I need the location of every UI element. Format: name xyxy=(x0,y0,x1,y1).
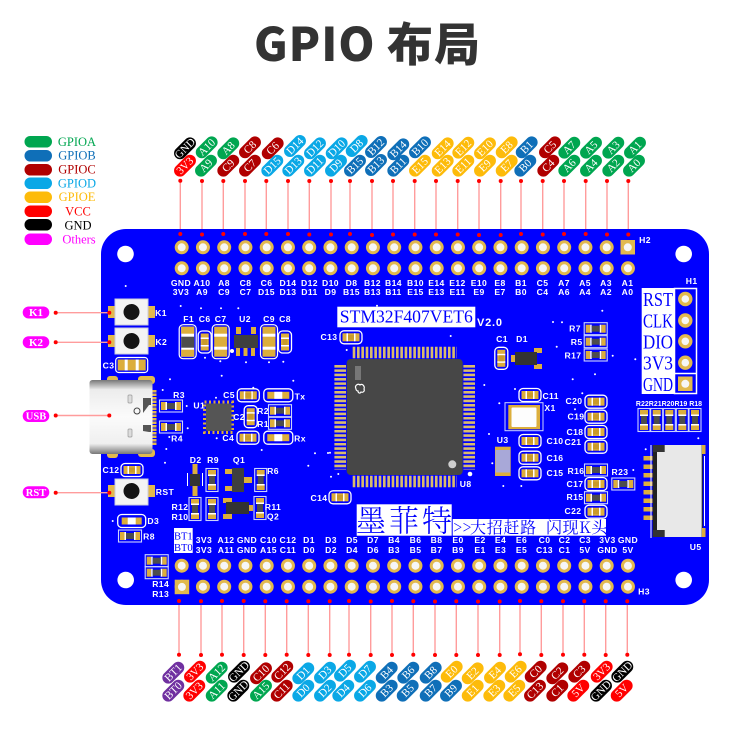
K1 label: K1 xyxy=(155,308,167,318)
crystal X1 with capacitors: C11 xyxy=(542,391,559,401)
SWD header H1: 3V3 xyxy=(643,352,673,374)
resistors R22 to R18 xyxy=(636,401,702,432)
top pin pills: A9 xyxy=(197,157,216,175)
SWD header H1: GND xyxy=(643,374,673,396)
bottom pin pills: C1 xyxy=(549,682,566,700)
bottom pin pills: 5V xyxy=(570,682,588,700)
C12 capacitor xyxy=(103,464,143,476)
bottom pin pills: GND xyxy=(226,678,251,704)
bottom header silkscreen: 3V3 xyxy=(599,535,616,545)
power section components: F1 xyxy=(183,314,194,324)
button K1 xyxy=(108,299,155,325)
bottom header silkscreen: B6 xyxy=(410,535,421,545)
right passive column: R23 xyxy=(612,467,628,477)
top header silkscreen: A4 xyxy=(579,287,591,297)
bottom pin pills: D1 xyxy=(295,665,313,683)
top header silkscreen: A2 xyxy=(600,287,612,297)
left callouts: RST xyxy=(26,488,46,499)
top header silkscreen: E9 xyxy=(473,287,485,297)
bottom pin pills: 3V3 xyxy=(184,680,206,702)
bottom pin pills: C3 xyxy=(571,663,589,681)
legend: GPIOA xyxy=(58,135,96,149)
top header silkscreen: E14 xyxy=(428,278,445,288)
U1 chip with passives: R1 xyxy=(257,419,269,429)
top pin pills: A8 xyxy=(220,139,238,158)
legend: GPIOE xyxy=(59,190,96,204)
top header silkscreen: B12 xyxy=(364,278,381,288)
D2 Q1 Q2 circuit: R10 xyxy=(172,512,188,522)
legend: VCC xyxy=(65,204,91,218)
bottom header silkscreen: D3 xyxy=(325,535,337,545)
top header silkscreen: A1 xyxy=(622,278,633,288)
bottom pin pills: E3 xyxy=(486,682,504,700)
MCU U8 xyxy=(340,352,472,489)
top pin pills: D8 xyxy=(348,137,366,155)
slogan label: 闪现K头 xyxy=(546,515,608,538)
bottom pin pills: A11 xyxy=(206,680,228,702)
bottom pin pills: GND xyxy=(610,659,635,685)
top pin pills: E8 xyxy=(498,139,516,156)
top pin pills: B13 xyxy=(366,154,387,176)
bottom header silkscreen: E0 xyxy=(452,535,464,545)
R14 R13 resistors: R13 xyxy=(152,589,169,599)
bottom header silkscreen: D5 xyxy=(346,535,358,545)
bottom pin pills: D4 xyxy=(335,682,353,700)
legend: Others xyxy=(62,232,96,246)
top pin pills xyxy=(172,133,649,179)
right passive column: R17 xyxy=(565,351,581,361)
D2 Q1 Q2 circuit: Q1 xyxy=(233,455,245,465)
brand label: 墨菲特 xyxy=(356,496,455,540)
top pin pills: E11 xyxy=(453,156,474,176)
C1 D1: C1 xyxy=(496,334,508,344)
bottom pin pills: B9 xyxy=(443,682,460,700)
SWD header H1: RST xyxy=(643,289,673,311)
U1 chip with passives: U1 xyxy=(193,400,205,410)
bottom pin pills: D6 xyxy=(356,682,375,700)
bottom header silkscreen: E1 xyxy=(474,545,486,555)
leader line endpoints on board xyxy=(179,234,628,602)
slogan label: 大招赶路 xyxy=(470,515,537,538)
top header silkscreen: A7 xyxy=(558,278,570,288)
bottom header silkscreen: C3 xyxy=(579,535,591,545)
right passive column: R5 xyxy=(571,337,583,347)
legend: GPIOB xyxy=(58,148,96,162)
crystal X1 with capacitors: X1 xyxy=(544,403,556,413)
power section components xyxy=(179,314,292,359)
top pin pills: B14 xyxy=(388,139,410,160)
legend: GND xyxy=(64,218,92,232)
bottom header silkscreen: B5 xyxy=(410,545,421,555)
USB resistors R3 R4: R4 xyxy=(171,434,183,444)
top pin pills: E14 xyxy=(433,138,454,159)
bottom pin pills: C13 xyxy=(525,680,546,702)
power section components: C6 xyxy=(199,314,211,324)
power section components: U2 xyxy=(239,314,251,324)
U1 chip with passives: C2 xyxy=(233,412,245,422)
power section components: C7 xyxy=(215,314,227,324)
bottom pin pills: D3 xyxy=(316,664,335,682)
board xyxy=(101,229,709,605)
bottom pin pills: E6 xyxy=(507,663,525,681)
C13 C14 capacitors: C13 xyxy=(321,332,337,342)
top header silkscreen: D10 xyxy=(322,278,339,288)
top header silkscreen: D11 xyxy=(301,287,318,297)
left callouts: K2 xyxy=(29,337,44,349)
top header silkscreen: D8 xyxy=(346,278,357,288)
top pin pills: E9 xyxy=(477,157,494,175)
button RST xyxy=(108,479,155,505)
top pin pills: B15 xyxy=(345,155,366,177)
top header silkscreen: GND xyxy=(171,278,191,288)
top header silkscreen: C4 xyxy=(537,287,548,297)
top header silkscreen: A3 xyxy=(600,278,612,288)
D2 Q1 Q2 circuit: R12 xyxy=(172,502,188,512)
U1 chip with passives: R2 xyxy=(257,406,269,416)
slogan label: >> xyxy=(453,515,472,538)
bottom header silkscreen xyxy=(196,535,638,555)
BT1 BT0 label box: BT0 xyxy=(174,543,193,554)
right passive column: C22 xyxy=(565,506,581,516)
bottom header silkscreen: B7 xyxy=(431,545,442,555)
square pin 1 pads xyxy=(175,240,635,594)
D3 LED xyxy=(118,514,159,528)
R14 R13 resistors xyxy=(145,555,169,599)
chip name label: STM32F407VET6 xyxy=(340,307,473,327)
C3 capacitor: C3 xyxy=(103,360,114,370)
top header silkscreen: E11 xyxy=(449,287,466,297)
top header silkscreen: A0 xyxy=(622,287,633,297)
via dots xyxy=(112,285,699,522)
C3 capacitor xyxy=(103,358,148,372)
R14 R13 resistors: R14 xyxy=(152,579,169,589)
top header silkscreen: A9 xyxy=(196,287,208,297)
top pin pills: E7 xyxy=(498,157,516,175)
SWD header H1: DIO xyxy=(643,332,673,354)
right passive column: C19 xyxy=(568,412,584,422)
bottom header silkscreen: GND xyxy=(618,535,638,545)
bottom header silkscreen: A11 xyxy=(218,545,234,555)
right passive column xyxy=(565,323,635,518)
crystal X1 with capacitors: C15 xyxy=(547,468,563,478)
bottom header silkscreen: C13 xyxy=(536,545,553,555)
top pin pills: A6 xyxy=(561,157,579,175)
bottom header silkscreen: C1 xyxy=(559,545,570,555)
power section components: C8 xyxy=(279,314,291,324)
legend: GPIOD xyxy=(58,176,96,190)
bottom header silkscreen: C10 xyxy=(260,535,277,545)
flash U3: U3 xyxy=(497,435,509,445)
top header silkscreen xyxy=(171,278,633,297)
SWD header H1 xyxy=(642,276,698,396)
left callouts: K1 xyxy=(29,307,43,319)
top pin pills: A3 xyxy=(605,139,623,157)
bottom header silkscreen: D1 xyxy=(303,535,315,545)
top pin pills: A2 xyxy=(605,157,623,175)
bottom pin pills: E0 xyxy=(443,663,461,681)
D2 Q1 Q2 circuit: Q2 xyxy=(267,512,279,522)
bottom pin pills: GND xyxy=(227,659,252,685)
title: GPIO 布局 xyxy=(254,9,481,75)
bottom pin pills: D0 xyxy=(295,682,313,700)
R8 resistor xyxy=(118,530,155,542)
bottom header silkscreen: 3V3 xyxy=(196,545,212,555)
top pin pills: A10 xyxy=(196,136,218,159)
bottom header silkscreen: C12 xyxy=(280,535,296,545)
bottom pin pills: BT1 xyxy=(162,662,185,684)
K2 label: K2 xyxy=(155,337,167,347)
top header silkscreen: B15 xyxy=(343,287,360,297)
bottom header silkscreen: GND xyxy=(237,535,257,545)
H2 label: H2 xyxy=(639,235,651,245)
slogan label xyxy=(453,515,608,538)
bottom header silkscreen: B9 xyxy=(452,545,464,555)
top pin pills: A5 xyxy=(582,139,601,157)
legend xyxy=(24,135,96,246)
bottom header silkscreen: C2 xyxy=(559,535,570,545)
top pin pills: A0 xyxy=(625,157,644,175)
bottom pin pills: B5 xyxy=(399,682,417,700)
right passive column: R15 xyxy=(567,492,583,502)
top pin pills: E12 xyxy=(453,138,474,159)
top header silkscreen: C6 xyxy=(261,278,272,288)
H3 label: H3 xyxy=(638,586,650,596)
U1 chip with passives: C4 xyxy=(222,433,234,443)
crystal X1 with capacitors: C16 xyxy=(547,453,563,463)
bottom pin pills: E5 xyxy=(506,682,524,700)
bottom pin pills: C10 xyxy=(251,663,272,684)
bottom pin pills xyxy=(160,657,636,704)
top pin pills: C9 xyxy=(220,157,238,175)
top pin pills: A7 xyxy=(561,139,579,157)
top pin pills: A1 xyxy=(626,139,644,157)
crystal X1 with capacitors xyxy=(505,388,563,480)
bottom pin pills: B4 xyxy=(378,664,396,682)
top header silkscreen: E10 xyxy=(471,278,487,288)
crystal X1 with capacitors: C10 xyxy=(547,436,563,446)
D2 Q1 Q2 circuit: R6 xyxy=(267,466,279,476)
right passive column: R16 xyxy=(568,466,584,476)
top header silkscreen: B13 xyxy=(364,287,381,297)
top pin pills: 3V3 xyxy=(174,155,197,177)
resistors R22 to R18: R22R21R20R19 R18 xyxy=(636,401,702,408)
D2 Q1 Q2 circuit xyxy=(172,455,281,522)
top pin pills: C4 xyxy=(540,157,558,175)
D2 Q1 Q2 circuit: R11 xyxy=(265,502,281,512)
bottom header silkscreen: 5V xyxy=(622,545,634,555)
bottom pin pills: D5 xyxy=(336,662,355,680)
C1 D1: D1 xyxy=(516,334,528,344)
right passive column: C17 xyxy=(567,479,583,489)
SWD header H1: H1 xyxy=(686,276,698,286)
top header silkscreen: B14 xyxy=(385,278,402,288)
C1 D1 xyxy=(495,334,542,369)
top header silkscreen: C7 xyxy=(240,287,251,297)
bottom pin pills: C11 xyxy=(271,680,293,702)
bottom header silkscreen: B4 xyxy=(388,535,400,545)
top header silkscreen: A5 xyxy=(579,278,591,288)
power section components: C9 xyxy=(263,314,275,324)
D2 Q1 Q2 circuit: D2 xyxy=(190,455,202,465)
top pin pills: C7 xyxy=(242,157,259,175)
top pin pills: D9 xyxy=(327,157,346,175)
legend: GPIOC xyxy=(58,162,96,176)
top header silkscreen: D15 xyxy=(258,287,275,297)
bottom pin pills: C2 xyxy=(549,665,566,682)
U1 chip with passives: Rx xyxy=(294,434,306,444)
bottom pin pills: D2 xyxy=(316,682,334,700)
pin headers H2 and H3 xyxy=(182,247,630,587)
bottom header silkscreen: B8 xyxy=(431,535,442,545)
top pin pills: E13 xyxy=(433,155,454,177)
U1 chip with passives xyxy=(193,389,306,444)
top header silkscreen: D12 xyxy=(301,278,318,288)
top header silkscreen: A10 xyxy=(194,278,210,288)
bottom header silkscreen: E3 xyxy=(495,545,506,555)
MCU U8: U8 xyxy=(460,479,472,489)
button K2 xyxy=(108,328,155,354)
top pin pills: D13 xyxy=(283,155,305,177)
bottom header silkscreen: D2 xyxy=(325,545,337,555)
R8 resistor: R8 xyxy=(143,532,155,542)
bottom pin pills: D7 xyxy=(356,663,375,681)
bottom pin pills: BT0 xyxy=(162,680,185,702)
D2 Q1 Q2 circuit: R9 xyxy=(207,455,219,465)
top pin pills: C5 xyxy=(542,139,559,156)
C12 capacitor: C12 xyxy=(103,465,119,475)
top header silkscreen: 3V3 xyxy=(173,287,189,297)
flash U3 xyxy=(495,435,511,476)
USB resistors R3 R4: R3 xyxy=(173,390,185,400)
right passive column: C21 xyxy=(565,437,581,447)
bottom header silkscreen: E4 xyxy=(495,535,506,545)
top header silkscreen: E12 xyxy=(449,278,466,288)
bottom header silkscreen: E5 xyxy=(516,545,527,555)
top header silkscreen: D13 xyxy=(280,287,296,297)
top pin pills: GND xyxy=(173,136,198,161)
top header silkscreen: A8 xyxy=(218,278,230,288)
bottom pin pills: A15 xyxy=(250,680,273,702)
bottom pin pills: 3V3 xyxy=(184,661,207,683)
D3 LED: D3 xyxy=(147,516,159,526)
bottom pin pills: C0 xyxy=(527,663,545,681)
bottom pin pills: GND xyxy=(589,678,614,704)
U1 chip with passives: Tx xyxy=(295,392,305,402)
top pin pills: B12 xyxy=(366,137,387,158)
bottom header silkscreen: D0 xyxy=(303,545,315,555)
bottom header silkscreen: D7 xyxy=(367,535,379,545)
top pin pills: E15 xyxy=(410,155,431,177)
bottom pin pills: B3 xyxy=(378,682,396,700)
bottom header silkscreen: D4 xyxy=(346,545,358,555)
USB-C connector xyxy=(90,376,156,458)
left callouts xyxy=(23,306,109,499)
connector U5: U5 xyxy=(690,542,702,552)
bottom pin pills: B7 xyxy=(422,682,440,700)
bottom pin pills: E2 xyxy=(464,665,482,682)
top pin pills: D14 xyxy=(284,135,307,157)
bottom pin pills: 5V xyxy=(613,682,631,700)
top header silkscreen: E8 xyxy=(494,278,506,288)
RST label: RST xyxy=(156,487,175,497)
right passive column: C20 xyxy=(566,396,582,406)
bottom header silkscreen: GND xyxy=(597,545,618,555)
top header silkscreen: D9 xyxy=(325,287,336,297)
top pin pills: D11 xyxy=(305,155,326,177)
leader lines: bottom header xyxy=(179,601,627,655)
top header silkscreen: B0 xyxy=(515,287,527,297)
top pin pills: E10 xyxy=(475,138,496,159)
SWD header H1: CLK xyxy=(643,310,673,332)
top header silkscreen: C8 xyxy=(240,278,251,288)
bottom pin pills: B6 xyxy=(400,664,418,682)
bottom header silkscreen: 5V xyxy=(579,545,591,555)
BT1 BT0 label box: BT1 xyxy=(174,532,193,542)
bottom header silkscreen: C11 xyxy=(280,545,296,555)
top pin pills: B10 xyxy=(410,137,431,158)
top pin pills: C6 xyxy=(264,140,282,157)
top header silkscreen: B1 xyxy=(515,278,527,288)
top header silkscreen: C5 xyxy=(537,278,548,288)
USB resistors R3 R4 xyxy=(160,390,185,444)
bottom pin pills: A12 xyxy=(206,662,228,684)
top pin pills: A4 xyxy=(582,157,601,175)
top header silkscreen: E7 xyxy=(494,287,506,297)
bottom header silkscreen: E6 xyxy=(516,535,527,545)
left callouts: USB xyxy=(26,412,46,423)
top header silkscreen: C9 xyxy=(218,287,230,297)
top pin pills: D15 xyxy=(262,155,284,177)
bottom pin pills: B8 xyxy=(422,664,440,682)
mounting holes xyxy=(117,246,692,588)
BT1 BT0 label box xyxy=(174,528,193,554)
bottom header silkscreen: A12 xyxy=(218,535,234,545)
bottom header silkscreen: C0 xyxy=(539,535,550,545)
C13 C14 capacitors xyxy=(311,331,362,504)
bottom header silkscreen: GND xyxy=(237,545,257,555)
top header silkscreen: A6 xyxy=(558,287,570,297)
version label: V2.0 xyxy=(477,317,503,329)
connector U5 xyxy=(648,445,706,552)
top header silkscreen: E13 xyxy=(428,287,445,297)
leader lines: top header xyxy=(180,181,628,234)
C13 C14 capacitors: C14 xyxy=(311,493,327,503)
top pin pills: B1 xyxy=(518,139,536,156)
top pin pills: C8 xyxy=(242,139,259,156)
top header silkscreen: B11 xyxy=(385,287,402,297)
top header silkscreen: D14 xyxy=(280,278,296,288)
bottom header silkscreen: A15 xyxy=(260,545,277,555)
bottom header silkscreen: 3V3 xyxy=(196,535,212,545)
top header silkscreen: B10 xyxy=(407,278,424,288)
bottom header silkscreen: D6 xyxy=(367,545,379,555)
top header silkscreen: E15 xyxy=(407,287,424,297)
bottom header silkscreen: B3 xyxy=(388,545,400,555)
top pin pills: D10 xyxy=(326,137,348,160)
bottom pin pills: 3V3 xyxy=(591,661,613,683)
U1 chip with passives: C5 xyxy=(223,390,235,400)
top pin pills: D12 xyxy=(304,138,326,160)
top pin pills: B0 xyxy=(517,157,535,175)
top pin pills: B11 xyxy=(388,155,409,177)
bottom header silkscreen: E2 xyxy=(474,535,486,545)
bottom pin pills: C12 xyxy=(272,661,293,683)
bottom pin pills: E4 xyxy=(487,664,504,682)
right passive column: C18 xyxy=(567,427,583,437)
right passive column: R7 xyxy=(569,324,581,334)
bottom pin pills: E1 xyxy=(464,682,482,700)
